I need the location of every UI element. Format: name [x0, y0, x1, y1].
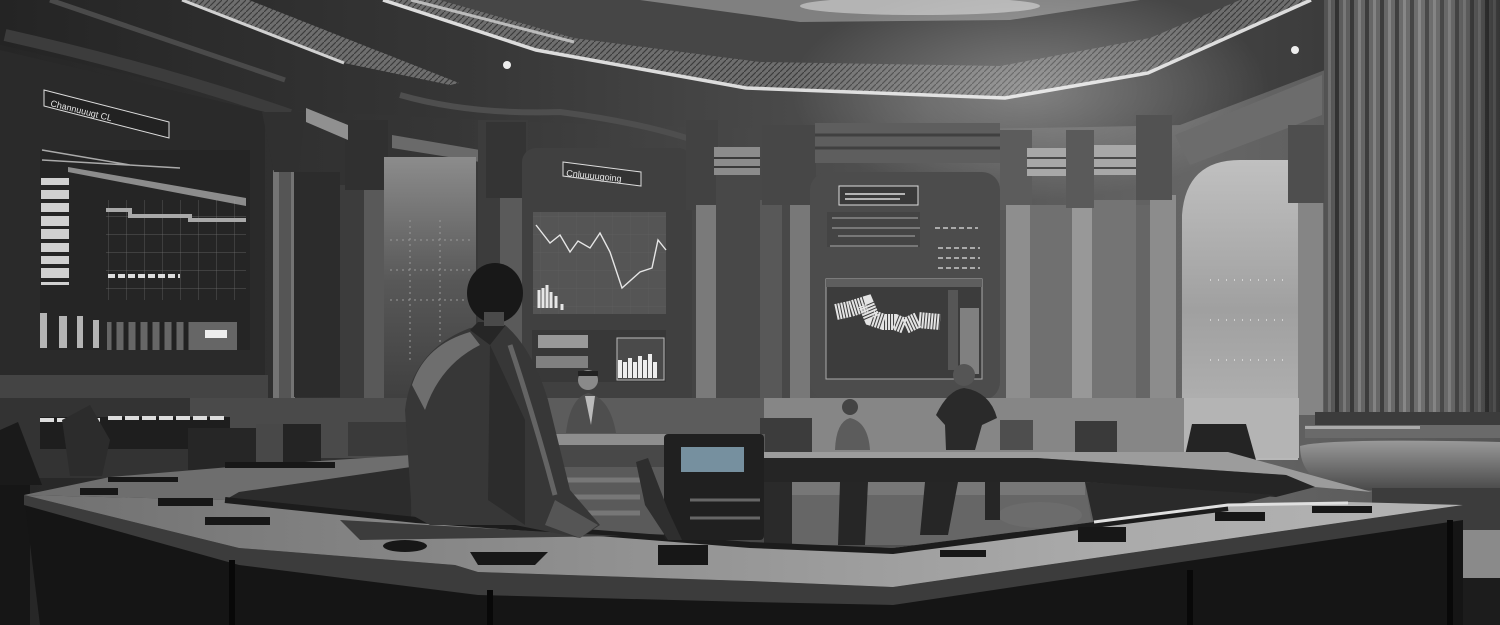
right columns — [1000, 115, 1176, 415]
centre lower screens — [532, 330, 666, 382]
upper frieze — [815, 123, 1000, 163]
bright window — [1182, 125, 1324, 460]
chairs and monitors behind table — [0, 405, 1256, 485]
large fluted column — [1300, 0, 1500, 625]
right bar chart screen — [826, 279, 982, 379]
far table left section — [24, 455, 411, 525]
left screen title plate — [44, 90, 169, 138]
left screen chart — [40, 150, 250, 350]
background seated figure — [566, 370, 616, 433]
far table right section — [764, 452, 1372, 545]
table devices — [80, 462, 1372, 565]
centre well behind man — [545, 434, 765, 534]
right screen wall — [810, 172, 1000, 400]
centre chair with tablet — [636, 434, 764, 540]
background standing figure right — [936, 364, 997, 450]
near table front fascia — [24, 495, 1463, 625]
centre screen line chart — [533, 212, 666, 314]
lit side panel — [384, 157, 476, 407]
background standing figure left — [835, 399, 870, 450]
main figure: man seen from behind — [405, 263, 600, 538]
table inner lip and shadow — [225, 500, 1348, 551]
lower room band — [0, 398, 1299, 625]
fascia panels — [232, 520, 1450, 625]
left screen title plate: Channuuugt CL — [50, 98, 113, 123]
pillar pair centre left — [478, 120, 816, 410]
centre screen title plate — [563, 162, 641, 186]
ceiling — [0, 0, 1325, 200]
fascia lit band — [24, 495, 1463, 605]
left wall panel — [0, 50, 265, 375]
columns left group — [262, 108, 480, 425]
near table top — [24, 495, 1463, 587]
centre screen title plate: Cnluuuugoing — [566, 168, 622, 184]
